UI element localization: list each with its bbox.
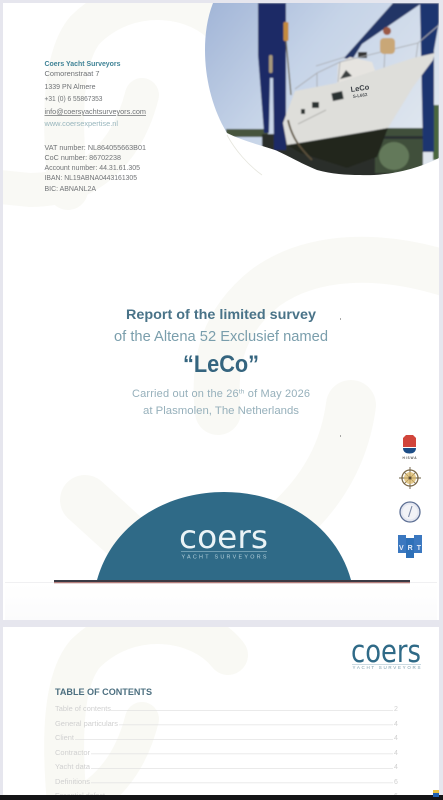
entry: essential defect: 6 bbox=[394, 793, 398, 800]
entry: contractor: 4 bbox=[394, 750, 398, 757]
address city: 1339 PN Almere bbox=[44, 82, 96, 91]
entry: client: Client bbox=[55, 735, 74, 742]
contents heading: TABLE OF CONTENTS bbox=[55, 687, 152, 698]
entry: client: 4 bbox=[394, 735, 398, 742]
white tarp bbox=[337, 57, 376, 84]
VRT letters: VRT bbox=[399, 545, 422, 552]
logo wordmark: coers bbox=[351, 634, 421, 670]
page 1 sheet bbox=[3, 3, 439, 620]
hull name: LeCo bbox=[350, 82, 370, 94]
HISWA label: HISWA bbox=[402, 456, 417, 460]
logo tagline: YACHT SURVEYORS bbox=[182, 554, 267, 560]
logo rule bbox=[352, 663, 421, 666]
entry: client bbox=[55, 734, 398, 740]
icon: HISWA membership badge bbox=[402, 435, 417, 460]
CoC number: CoC number: 86702238 bbox=[44, 153, 121, 162]
bottom black bar bbox=[0, 790, 443, 800]
vessel type: of the Altena 52 Exclusief named bbox=[114, 329, 328, 345]
entry: table of contents bbox=[55, 706, 398, 711]
entry: general particulars: 4 bbox=[394, 721, 398, 728]
logo wordmark: coers bbox=[179, 518, 268, 556]
icon: surveyor dial badge bbox=[400, 502, 420, 522]
address street: Comorenstraat 7 bbox=[44, 69, 100, 78]
BIC: BIC: ABNANL2A bbox=[44, 184, 96, 193]
person bbox=[380, 38, 395, 54]
logo rule bbox=[181, 550, 267, 553]
faint arc below photo bbox=[227, 135, 262, 175]
icon: VRT badge bbox=[398, 535, 422, 558]
page 2 logo bbox=[351, 634, 421, 670]
report title block bbox=[114, 307, 328, 417]
survey date: th bbox=[239, 388, 245, 396]
entry: essential defect bbox=[56, 792, 398, 795]
background swirl page 2 bbox=[0, 624, 228, 800]
phone: +31 (0) 6 55867353 bbox=[44, 94, 102, 103]
website: www.coersexpertise.nl bbox=[44, 119, 118, 128]
entry: contractor bbox=[55, 750, 398, 755]
background swirl page 1 bbox=[0, 0, 443, 550]
company name: Coers Yacht Surveyors bbox=[44, 59, 120, 68]
email: info@coersyachtsurveyors.com bbox=[44, 107, 146, 116]
account number: Account number: 44.31.61.305 bbox=[44, 163, 140, 172]
survey date: Carried out on the 26 bbox=[132, 388, 239, 400]
photo: yacht LeCo in boat lift bbox=[200, 0, 443, 180]
vessel name: “LeCo” bbox=[183, 351, 259, 378]
hull bbox=[283, 53, 435, 145]
survey date: of May 2026 bbox=[245, 388, 310, 400]
entry: yacht data: Yacht data bbox=[55, 764, 90, 771]
entry: table of contents: Table of contents bbox=[55, 706, 112, 713]
entry: contractor: Contractor bbox=[55, 750, 91, 757]
IBAN: IBAN: NL19ABNA0443161305 bbox=[44, 173, 137, 182]
windows bbox=[331, 91, 344, 101]
icon: compass wheel badge bbox=[399, 467, 421, 489]
contact details bbox=[44, 59, 146, 193]
railings bbox=[295, 25, 439, 90]
entry: general particulars: General particulars bbox=[55, 721, 119, 728]
stray marks bbox=[340, 318, 341, 436]
entry: yacht data bbox=[55, 764, 398, 769]
logo tagline: YACHT SURVEYORS bbox=[352, 665, 420, 670]
entry: yacht data: 4 bbox=[394, 764, 398, 771]
entry: general particulars bbox=[55, 721, 398, 728]
survey location: at Plasmolen, The Netherlands bbox=[143, 405, 300, 417]
antifoul bbox=[287, 128, 388, 168]
entry: table of contents: 2 bbox=[394, 706, 398, 713]
table of contents bbox=[55, 687, 398, 800]
entry: definitions bbox=[56, 778, 398, 784]
baseline rule bbox=[5, 580, 437, 583]
report heading: Report of the limited survey bbox=[126, 307, 317, 322]
entry: essential defect: Essential defect bbox=[55, 793, 105, 800]
dome with company logo bbox=[97, 492, 351, 580]
VAT number: VAT number: NL864055663B01 bbox=[44, 143, 146, 152]
entry: definitions: Definitions bbox=[55, 779, 91, 786]
hull registration: S-L662 bbox=[352, 92, 368, 99]
page 2 sheet bbox=[3, 627, 439, 795]
entry: definitions: 6 bbox=[394, 779, 398, 786]
